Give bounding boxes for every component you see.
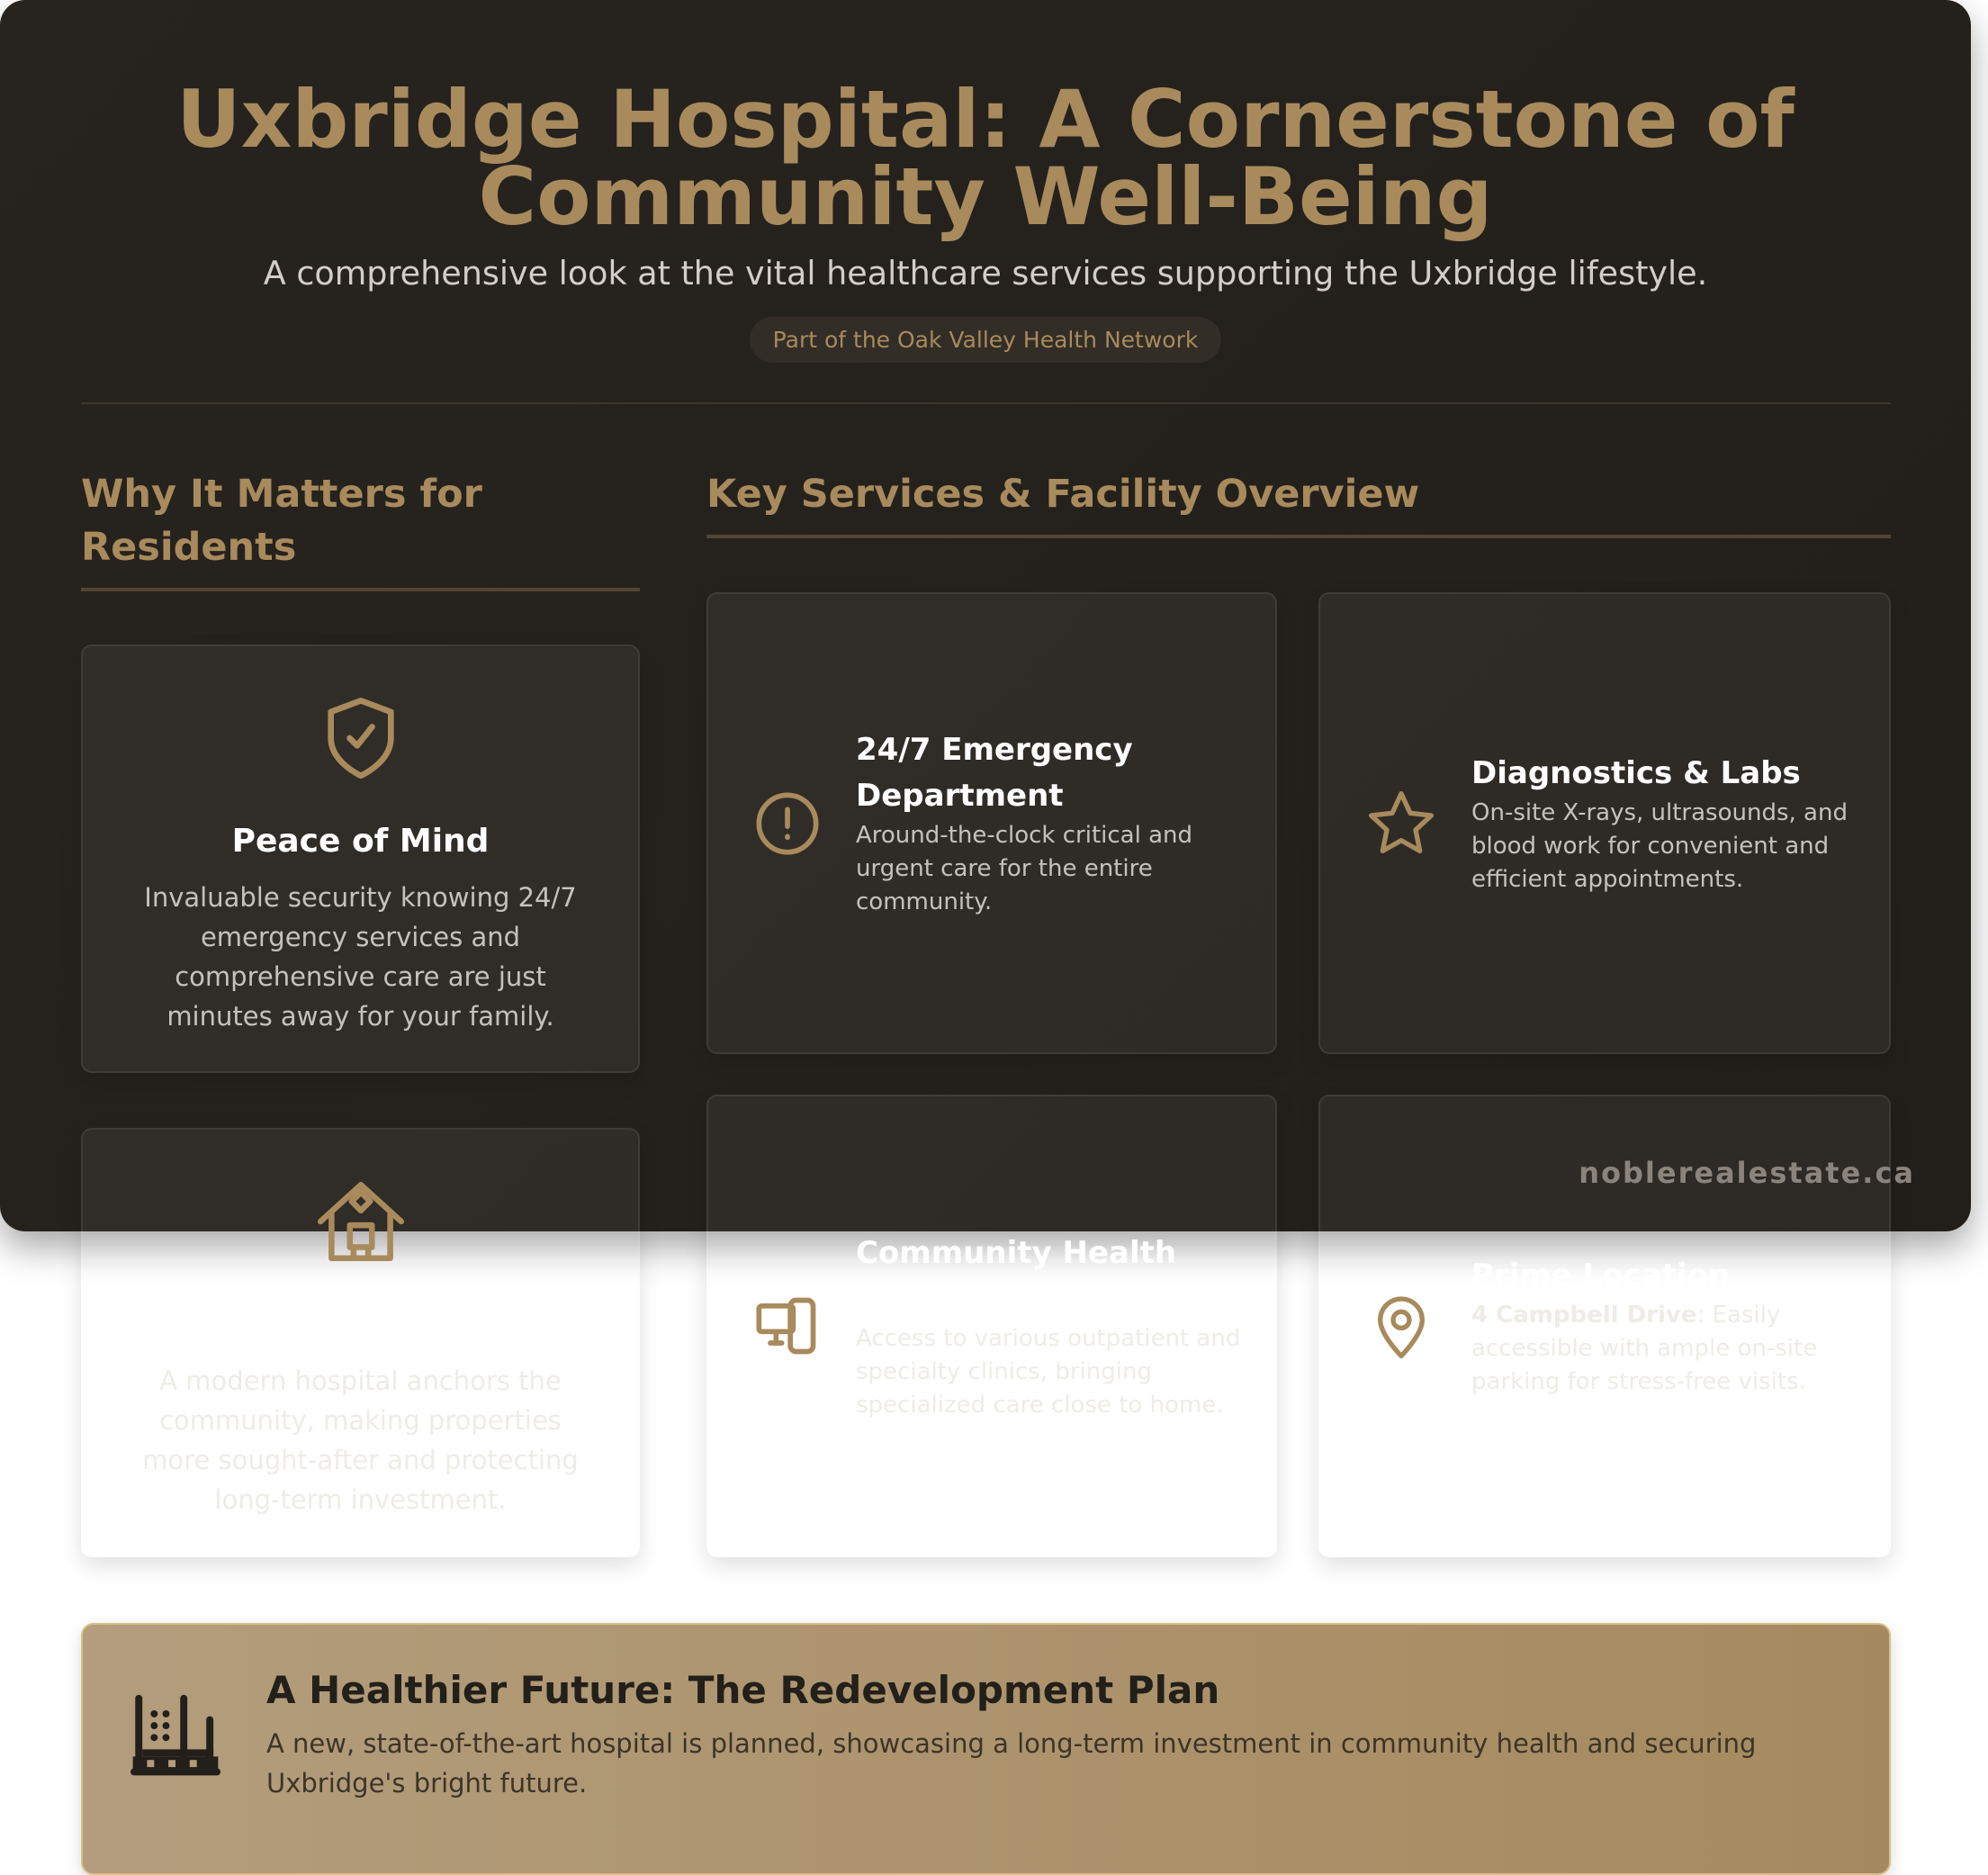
card: peace of mind: Invaluable security knowing 24/7 emergency services and comprehensive care are just minutes away for your family. (144, 882, 577, 1032)
card: real estate value (81, 1128, 640, 1557)
card: emergency: 24/7 Emergency Department (856, 732, 1133, 814)
banner text: A new, state-of-the-art hospital is planned, showcasing a long-term investment in community health and securing Uxbridge's bright future. (266, 1728, 1756, 1798)
card: real estate value: A modern hospital anchors the community, making properties more sought-after and protecting long-term investment. (142, 1366, 579, 1515)
network pill: Part of the Oak Valley Health Network (773, 327, 1198, 353)
card: community clinics: Community Health Clinics (856, 1235, 1176, 1316)
card: peace of mind: Peace of Mind (232, 823, 489, 860)
title: Community Well-Being (479, 150, 1492, 243)
card: prime location: 4 Campbell Drive: Easily accessible with ample on-site parking for stress-free visits. (1471, 1302, 1817, 1395)
card: community clinics (706, 1095, 1277, 1557)
card: prime location (1318, 1095, 1891, 1557)
card: diagnostics (1318, 592, 1891, 1054)
card: real estate value: Boosts Real Estate Value (133, 1306, 588, 1343)
banner title: A Healthier Future: The Redevelopment Plan (266, 1668, 1219, 1712)
card: peace of mind (81, 645, 640, 1073)
title: Uxbridge Hospital: A Cornerstone of (176, 73, 1795, 166)
watermark: noblerealestate.ca (1579, 1156, 1915, 1190)
card: emergency: Around-the-clock critical and urgent care for the entire community. (856, 822, 1192, 915)
icon: clinics (756, 1298, 815, 1354)
heading: why it matters: Residents (81, 525, 296, 570)
icon: house (317, 1182, 405, 1261)
icon: shield check (328, 698, 394, 779)
heading: why it matters (81, 472, 482, 570)
network pill (750, 317, 1221, 363)
icon: map pin (1378, 1296, 1425, 1358)
card: diagnostics: Diagnostics & Labs (1471, 754, 1801, 790)
icon: alert circle (756, 792, 819, 855)
card: community clinics: Access to various outpatient and specialty clinics, bringing specialized care close to home. (856, 1325, 1240, 1419)
dark header panel (0, 0, 1971, 1231)
card: diagnostics: On-site X-rays, ultrasounds, and blood work for convenient and efficient appointments. (1471, 799, 1848, 893)
subtitle: A comprehensive look at the vital healthcare services supporting the Uxbridge lifestyle. (264, 254, 1707, 293)
banner: redevelopment plan (81, 1623, 1891, 1875)
card: prime location: Prime Location (1471, 1258, 1730, 1294)
card: emergency (706, 592, 1277, 1054)
icon: star (1369, 791, 1434, 853)
heading: why it matters: Why It Matters for (81, 472, 482, 517)
icon: building (130, 1694, 220, 1775)
title (176, 73, 1795, 243)
heading: key services: Key Services & Facility Overview (706, 472, 1419, 517)
